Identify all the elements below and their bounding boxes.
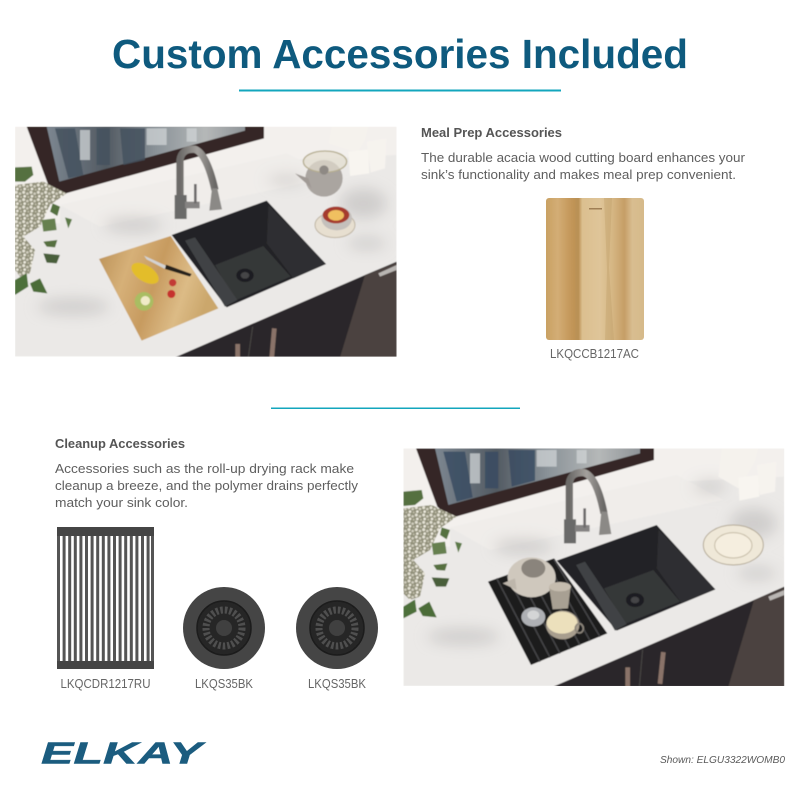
text: cleanup description: match your sink color. bbox=[55, 495, 188, 510]
white canisters bbox=[328, 127, 368, 152]
photo: sink with drying rack bbox=[403, 448, 784, 687]
text: meal prep description: The durable acacia wood cutting board enhances your bbox=[421, 150, 746, 165]
text: cleanup description: cleanup a breeze, and the polymer drains perfectly bbox=[55, 478, 359, 493]
cups bbox=[549, 587, 571, 609]
flowers bbox=[403, 490, 462, 618]
sink bbox=[172, 201, 326, 307]
heading: meal prep accessories: Meal Prep Accessories bbox=[421, 125, 562, 140]
kettle bbox=[305, 160, 343, 197]
cabinet handles bbox=[658, 652, 666, 684]
sink bbox=[557, 525, 715, 631]
label: LKQS35BK 2: LKQS35BK bbox=[308, 677, 367, 691]
cutting board product bbox=[546, 198, 644, 340]
drain product 1 bbox=[183, 587, 265, 669]
drying rack product bbox=[57, 527, 154, 669]
caption: shown model: Shown: ELGU3322WOMB0 bbox=[660, 754, 785, 766]
food bbox=[131, 262, 159, 284]
photo: sink with cutting board bbox=[15, 127, 397, 357]
window bbox=[27, 127, 264, 195]
text: meal prep description bbox=[421, 150, 746, 182]
label: LKQCDR1217RU: LKQCDR1217RU bbox=[60, 677, 150, 691]
faucet bbox=[180, 149, 215, 197]
plates bbox=[703, 525, 763, 565]
marble veins bbox=[427, 481, 777, 645]
teapot bbox=[508, 557, 556, 597]
wall and counter bbox=[15, 155, 396, 356]
marble veins bbox=[37, 175, 387, 315]
cabinet handles bbox=[269, 328, 277, 357]
faucet bbox=[569, 473, 604, 520]
text: meal prep description: sink’s functionality and makes meal prep convenient. bbox=[421, 167, 736, 182]
cabinets bbox=[553, 587, 784, 687]
drying rack in sink bbox=[488, 558, 607, 665]
white canisters bbox=[724, 479, 738, 488]
logo: Elkay: ELKAY bbox=[41, 736, 207, 770]
flowers bbox=[15, 167, 72, 295]
text: cleanup description: Accessories such as the roll-up drying rack make bbox=[55, 461, 354, 476]
label: LKQCCB1217AC: LKQCCB1217AC bbox=[550, 347, 639, 361]
wall and counter bbox=[404, 476, 784, 686]
tea cup bbox=[315, 212, 355, 238]
title: Custom Accessories Included bbox=[112, 31, 688, 77]
window bbox=[416, 448, 654, 518]
label: LKQS35BK 1: LKQS35BK bbox=[195, 677, 254, 691]
drain product 2 bbox=[296, 587, 378, 669]
text: cleanup description bbox=[55, 461, 359, 510]
heading: cleanup accessories: Cleanup Accessories bbox=[55, 436, 185, 451]
cutting board bbox=[99, 236, 218, 341]
cabinets bbox=[175, 262, 397, 357]
